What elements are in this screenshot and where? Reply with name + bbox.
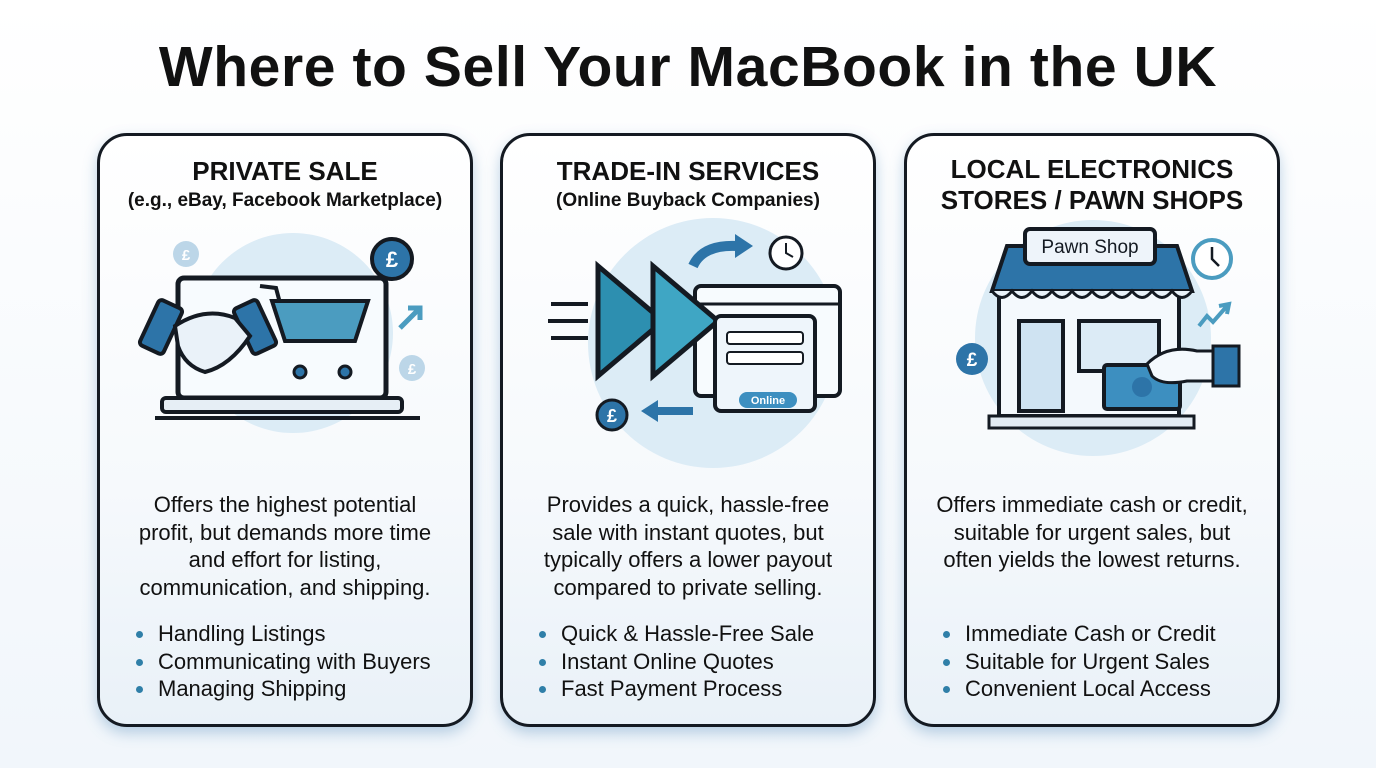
illustration: laptop with handshake and cart: £ bbox=[182, 247, 191, 264]
bullet list: private sale: Managing Shipping bbox=[158, 676, 346, 701]
illustration: laptop with handshake and cart: £ bbox=[408, 361, 417, 378]
bullet list: private sale: Handling Listings bbox=[158, 621, 326, 646]
description: local stores: suitable for urgent sales, but bbox=[954, 520, 1230, 544]
heading: local electronics stores bbox=[941, 154, 1243, 215]
bullet list: trade-in: Fast Payment Process bbox=[561, 676, 782, 701]
illustration: pawn shop storefront: £ bbox=[967, 350, 978, 371]
heading: private sale: PRIVATE SALE bbox=[192, 156, 378, 186]
illustration: fast forward and online quote bbox=[548, 218, 842, 468]
illustration: pawn shop storefront: Pawn Shop bbox=[1041, 237, 1139, 258]
bullet list: trade-in: Instant Online Quotes bbox=[561, 648, 774, 674]
heading: local electronics stores: LOCAL ELECTRONICS bbox=[951, 154, 1233, 184]
bullet list: local stores bbox=[943, 621, 1216, 701]
illustration: fast forward and online quote: Online bbox=[751, 395, 785, 407]
illustration: fast forward and online quote: £ bbox=[607, 406, 617, 426]
heading: local electronics stores: STORES / PAWN SHOPS bbox=[941, 185, 1243, 215]
subheading: online buyback: (Online Buyback Companies) bbox=[556, 190, 820, 211]
description: private sale: communication, and shipping. bbox=[139, 574, 431, 600]
bullet list: local stores: Immediate Cash or Credit bbox=[965, 621, 1216, 646]
description: trade-in: typically offers a lower payout bbox=[544, 547, 832, 572]
description: private sale bbox=[139, 492, 431, 600]
description: trade-in: Provides a quick, hassle-free bbox=[547, 492, 829, 517]
bullet list: private sale: Communicating with Buyers bbox=[158, 648, 431, 674]
illustration: laptop with handshake and cart: £ bbox=[386, 247, 399, 272]
description: local stores bbox=[936, 492, 1248, 572]
description: private sale: Offers the highest potential bbox=[154, 492, 416, 517]
bullet list: local stores: Convenient Local Access bbox=[965, 676, 1211, 701]
description: trade-in: compared to private selling. bbox=[553, 574, 823, 600]
panel: trade-in services bbox=[500, 133, 876, 727]
illustration: pawn shop storefront bbox=[956, 220, 1240, 456]
illustration: laptop with handshake and cart bbox=[138, 233, 425, 433]
subheading: examples: (e.g., eBay, Facebook Marketplace) bbox=[128, 190, 442, 211]
panel: private sale bbox=[97, 133, 473, 727]
heading: trade-in: TRADE-IN SERVICES bbox=[557, 156, 819, 186]
bullet list: local stores: Suitable for Urgent Sales bbox=[965, 648, 1210, 674]
bullet list: trade-in: Quick & Hassle-Free Sale bbox=[561, 621, 814, 646]
description: trade-in bbox=[544, 492, 832, 600]
description: private sale: and effort for listing, bbox=[189, 547, 381, 572]
title: Where to Sell Your MacBook in the UK bbox=[159, 35, 1217, 99]
panel: local stores / pawn shops bbox=[904, 133, 1280, 727]
bullet list: private sale bbox=[136, 621, 431, 701]
description: local stores: often yields the lowest returns. bbox=[943, 547, 1241, 572]
description: local stores: Offers immediate cash or credit, bbox=[936, 492, 1248, 517]
description: trade-in: sale with instant quotes, but bbox=[552, 520, 824, 544]
bullet list: trade-in bbox=[539, 621, 814, 701]
description: private sale: profit, but demands more time bbox=[139, 520, 431, 544]
